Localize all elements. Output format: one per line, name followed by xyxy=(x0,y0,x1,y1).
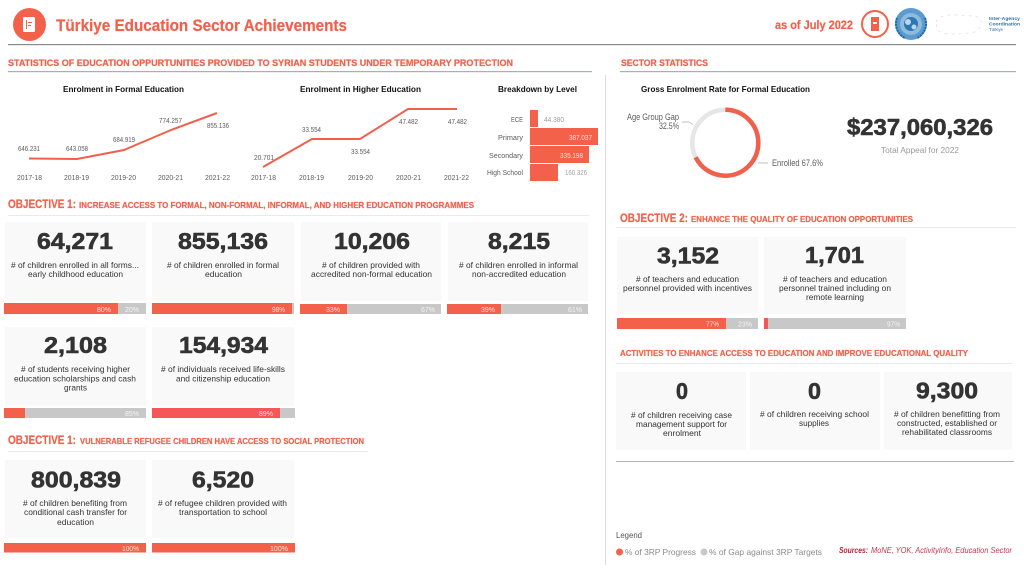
card: conditional cash transfer: # of children benefiting from xyxy=(23,498,127,508)
card: school supplies: supplies xyxy=(799,418,829,428)
logo: Inter-Agency Coordination text: Inter-Agency xyxy=(989,16,1020,21)
card: conditional cash transfer: conditional cash transfer for xyxy=(24,507,127,517)
heading: objective 1 access xyxy=(8,199,589,216)
card: accredited non-formal education: # of children provided with xyxy=(322,260,420,270)
card: classrooms: constructed, established or xyxy=(897,418,997,428)
heading: objective 2: ENHANCE THE QUALITY OF EDUCATION OPPORTUNITIES xyxy=(691,214,913,224)
stat: total appeal xyxy=(847,114,993,155)
bar chart: breakdown by level: Breakdown by Level xyxy=(498,84,577,94)
bar chart: breakdown by level: High School xyxy=(487,168,523,177)
card: transportation to school: # of refugee children provided with xyxy=(158,498,287,508)
card: teachers with incentives: 3,152 xyxy=(657,242,719,268)
card: informal non-accredited education: # of children enrolled in informal xyxy=(459,260,578,270)
line chart: enrolment in formal education: 643.058 xyxy=(66,144,88,153)
card: conditional cash transfer: 100% xyxy=(122,544,139,553)
card: life-skills and citizenship education: and citizenship education xyxy=(176,374,270,384)
card: life-skills and citizenship education: 154,934 xyxy=(179,332,268,358)
card: transportation to school xyxy=(152,460,295,553)
line chart: enrolment in higher education: 47.482 xyxy=(399,117,418,126)
bar chart: breakdown by level xyxy=(487,84,598,181)
card: accredited non-formal education: 67% xyxy=(421,305,435,314)
card: informal non-accredited education: 8,215 xyxy=(488,228,550,254)
heading: objective 2: OBJECTIVE 2: xyxy=(620,213,688,225)
card: classrooms: 9,300 xyxy=(916,378,978,404)
card: informal non-accredited education: 39% xyxy=(481,305,495,314)
card: teachers trained: 97% xyxy=(887,320,900,328)
heading: objective 1 social protection: OBJECTIVE 1: xyxy=(8,435,76,447)
line chart: enrolment in higher education: 2017-18 xyxy=(251,173,276,182)
line chart: enrolment in formal education: 2019-20 xyxy=(111,173,136,182)
card: case management support: 0 xyxy=(676,378,688,404)
card: classrooms: # of children benefitting from xyxy=(894,409,1000,419)
donut chart: gross enrolment rate: Gross Enrolment Rate for Formal Education xyxy=(641,84,810,94)
card: teachers with incentives: personnel provided with incentives xyxy=(623,283,752,293)
icon: UN emblem xyxy=(895,8,927,40)
bar chart: breakdown by level: 160.326 xyxy=(565,168,587,177)
card: accredited non-formal education: 33% xyxy=(326,305,340,314)
legend: % of Gap against 3RP Targets xyxy=(709,547,822,557)
card: formal education: education xyxy=(205,269,242,279)
card: transportation to school: transportation to school xyxy=(179,507,267,517)
card: teachers trained: # of teachers and education xyxy=(783,274,887,284)
card: school supplies xyxy=(750,372,880,450)
card: teachers with incentives xyxy=(617,237,758,329)
heading: objective 1 social protection xyxy=(8,435,368,452)
card: early childhood education: 20% xyxy=(125,305,139,314)
donut chart: gross enrolment rate xyxy=(627,84,823,176)
heading: objective 1 access: INCREASE ACCESS TO FORMAL, NON-FORMAL, INFORMAL, AND HIGHER EDUCATION PROGRAMMES xyxy=(79,200,474,210)
card: classrooms xyxy=(884,372,1012,450)
card: formal education: 855,136 xyxy=(178,228,268,254)
sources note: MoNE, YOK, ActivityInfo, Education Sector xyxy=(871,546,1012,555)
card: teachers trained xyxy=(764,237,906,329)
card: conditional cash transfer: education xyxy=(57,517,94,527)
card: case management support xyxy=(616,372,746,450)
line chart: enrolment in formal education: 646.231 xyxy=(18,144,40,153)
card: higher education scholarships: 85% xyxy=(125,409,139,418)
card: school supplies: 0 xyxy=(808,378,821,404)
bar chart: breakdown by level: ECE xyxy=(511,115,523,124)
card: higher education scholarships: # of students receiving higher xyxy=(21,364,130,374)
line chart: enrolment in higher education xyxy=(251,84,469,182)
card: accredited non-formal education: 10,206 xyxy=(334,228,410,254)
card: informal non-accredited education xyxy=(447,222,588,314)
bar chart: breakdown by level: 387.037 xyxy=(569,133,592,142)
logo: Inter-Agency Coordination text xyxy=(989,16,1020,32)
header: title with icon xyxy=(13,8,347,41)
line chart: enrolment in formal education: 2021-22 xyxy=(205,173,230,182)
card: early childhood education: early childhood education xyxy=(28,269,123,279)
card: accredited non-formal education: accredited non-formal education xyxy=(311,269,432,279)
card: teachers with incentives: # of teachers and education xyxy=(636,274,739,284)
line chart: enrolment in formal education: 2020-21 xyxy=(158,173,183,182)
stat: total appeal: $237,060,326 xyxy=(847,114,993,140)
card: teachers trained: 1,701 xyxy=(805,242,864,268)
card: transportation to school: 100% xyxy=(270,544,288,553)
card: transportation to school: 6,520 xyxy=(192,466,254,492)
line chart: enrolment in higher education: 20.701 xyxy=(254,153,274,162)
heading: objective 2 xyxy=(616,213,1016,228)
card: accredited non-formal education xyxy=(300,222,441,314)
header: date and logos xyxy=(775,8,1020,40)
card: formal education: 98% xyxy=(272,305,285,314)
card: higher education scholarships xyxy=(4,327,146,418)
card: conditional cash transfer xyxy=(4,460,146,553)
card: teachers with incentives: 77% xyxy=(706,320,719,328)
bar chart: breakdown by level: Secondary xyxy=(489,151,523,160)
card: higher education scholarships: grants xyxy=(64,382,87,392)
line chart: enrolment in formal education xyxy=(17,84,230,182)
line chart: enrolment in higher education: 47.482 xyxy=(448,117,467,126)
title: Türkiye Education Sector Achievements xyxy=(56,16,347,35)
section heading: sector statistics: SECTOR STATISTICS xyxy=(621,58,708,68)
card: informal non-accredited education: 61% xyxy=(568,305,582,314)
heading: objective 1 access: OBJECTIVE 1: xyxy=(8,199,76,211)
heading: objective 1 social protection: VULNERABLE REFUGEE CHILDREN HAVE ACCESS TO SOCIAL PROTECTION xyxy=(80,436,364,446)
card: case management support: enrolment xyxy=(663,428,702,438)
line chart: enrolment in higher education: 33.554 xyxy=(302,125,321,134)
card: early childhood education: # of children enrolled in all forms... xyxy=(11,260,139,270)
line chart: enrolment in formal education: 855.136 xyxy=(207,121,229,130)
card: early childhood education: 80% xyxy=(97,305,111,314)
card: teachers with incentives: 23% xyxy=(738,320,752,328)
icon: notebook badge xyxy=(13,8,46,41)
card: formal education xyxy=(152,222,294,314)
line chart: enrolment in higher education: 2021-22 xyxy=(444,173,469,182)
bar chart: breakdown by level: Primary xyxy=(498,133,523,142)
card: higher education scholarships: 2,108 xyxy=(44,332,107,358)
line chart: enrolment in formal education: 774.257 xyxy=(159,116,182,125)
donut chart: gross enrolment rate: 32.5% xyxy=(659,121,679,131)
card: early childhood education xyxy=(4,222,146,314)
card: classrooms: rehabilitated classrooms xyxy=(902,427,992,437)
sources note: Sources: xyxy=(839,546,868,555)
logo: Inter-Agency Coordination text: Türkiye xyxy=(989,27,1003,32)
legend xyxy=(616,530,822,557)
card: life-skills and citizenship education: 89% xyxy=(259,409,273,418)
line chart: enrolment in formal education: 2017-18 xyxy=(17,173,42,182)
line chart: enrolment in formal education: Enrolment in Formal Education xyxy=(63,84,184,94)
card: life-skills and citizenship education: # of individuals received life-skills xyxy=(161,364,285,374)
card: case management support: # of children receiving case xyxy=(631,410,732,420)
line chart: enrolment in higher education: 2018-19 xyxy=(299,173,324,182)
line chart: enrolment in higher education: 33.554 xyxy=(351,147,370,156)
bar chart: breakdown by level: 335.198 xyxy=(560,151,583,160)
section heading: statistics: STATISTICS OF EDUCATION OPPURTUNITIES PROVIDED TO SYRIAN STUDENTS UNDER TEMPORARY PROTECTION xyxy=(8,58,513,68)
line chart: enrolment in formal education: 2018-19 xyxy=(64,173,89,182)
line chart: enrolment in formal education: 684.919 xyxy=(113,135,135,144)
stat: total appeal: Total Appeal for 2022 xyxy=(881,146,960,155)
heading: activities: ACTIVITIES TO ENHANCE ACCESS TO EDUCATION AND IMPROVE EDUCATIONAL QUALITY xyxy=(620,348,968,358)
card: life-skills and citizenship education xyxy=(152,327,295,418)
bar chart: breakdown by level: 44.380 xyxy=(544,115,564,124)
card: informal non-accredited education: non-accredited education xyxy=(472,269,566,279)
donut chart: gross enrolment rate: Enrolled 67.6% xyxy=(772,158,823,168)
card: teachers trained: remote learning xyxy=(806,292,864,302)
line chart: enrolment in higher education: 2020-21 xyxy=(396,173,421,182)
card: school supplies: # of children receiving school xyxy=(760,409,869,419)
legend: % of 3RP Progress xyxy=(625,547,696,557)
card: higher education scholarships: education scholarships and cash xyxy=(14,374,136,384)
donut chart: gross enrolment rate: Age Group Gap xyxy=(627,112,679,122)
card: formal education: # of children enrolled in formal xyxy=(167,260,279,270)
legend: Legend xyxy=(616,530,642,540)
card: early childhood education: 64,271 xyxy=(37,228,113,254)
card: case management support: management support for xyxy=(636,419,727,429)
icon: outlined notebook badge xyxy=(862,11,888,37)
line chart: enrolment in higher education: Enrolment in Higher Education xyxy=(300,84,421,94)
card: teachers trained: personnel trained including on xyxy=(779,283,891,293)
card: conditional cash transfer: 800,839 xyxy=(31,466,121,492)
logo: faint partner mark xyxy=(936,15,981,34)
logo: Inter-Agency Coordination text: Coordination xyxy=(989,22,1020,26)
date: as of July 2022 xyxy=(775,20,853,32)
line chart: enrolment in higher education: 2019-20 xyxy=(348,173,373,182)
